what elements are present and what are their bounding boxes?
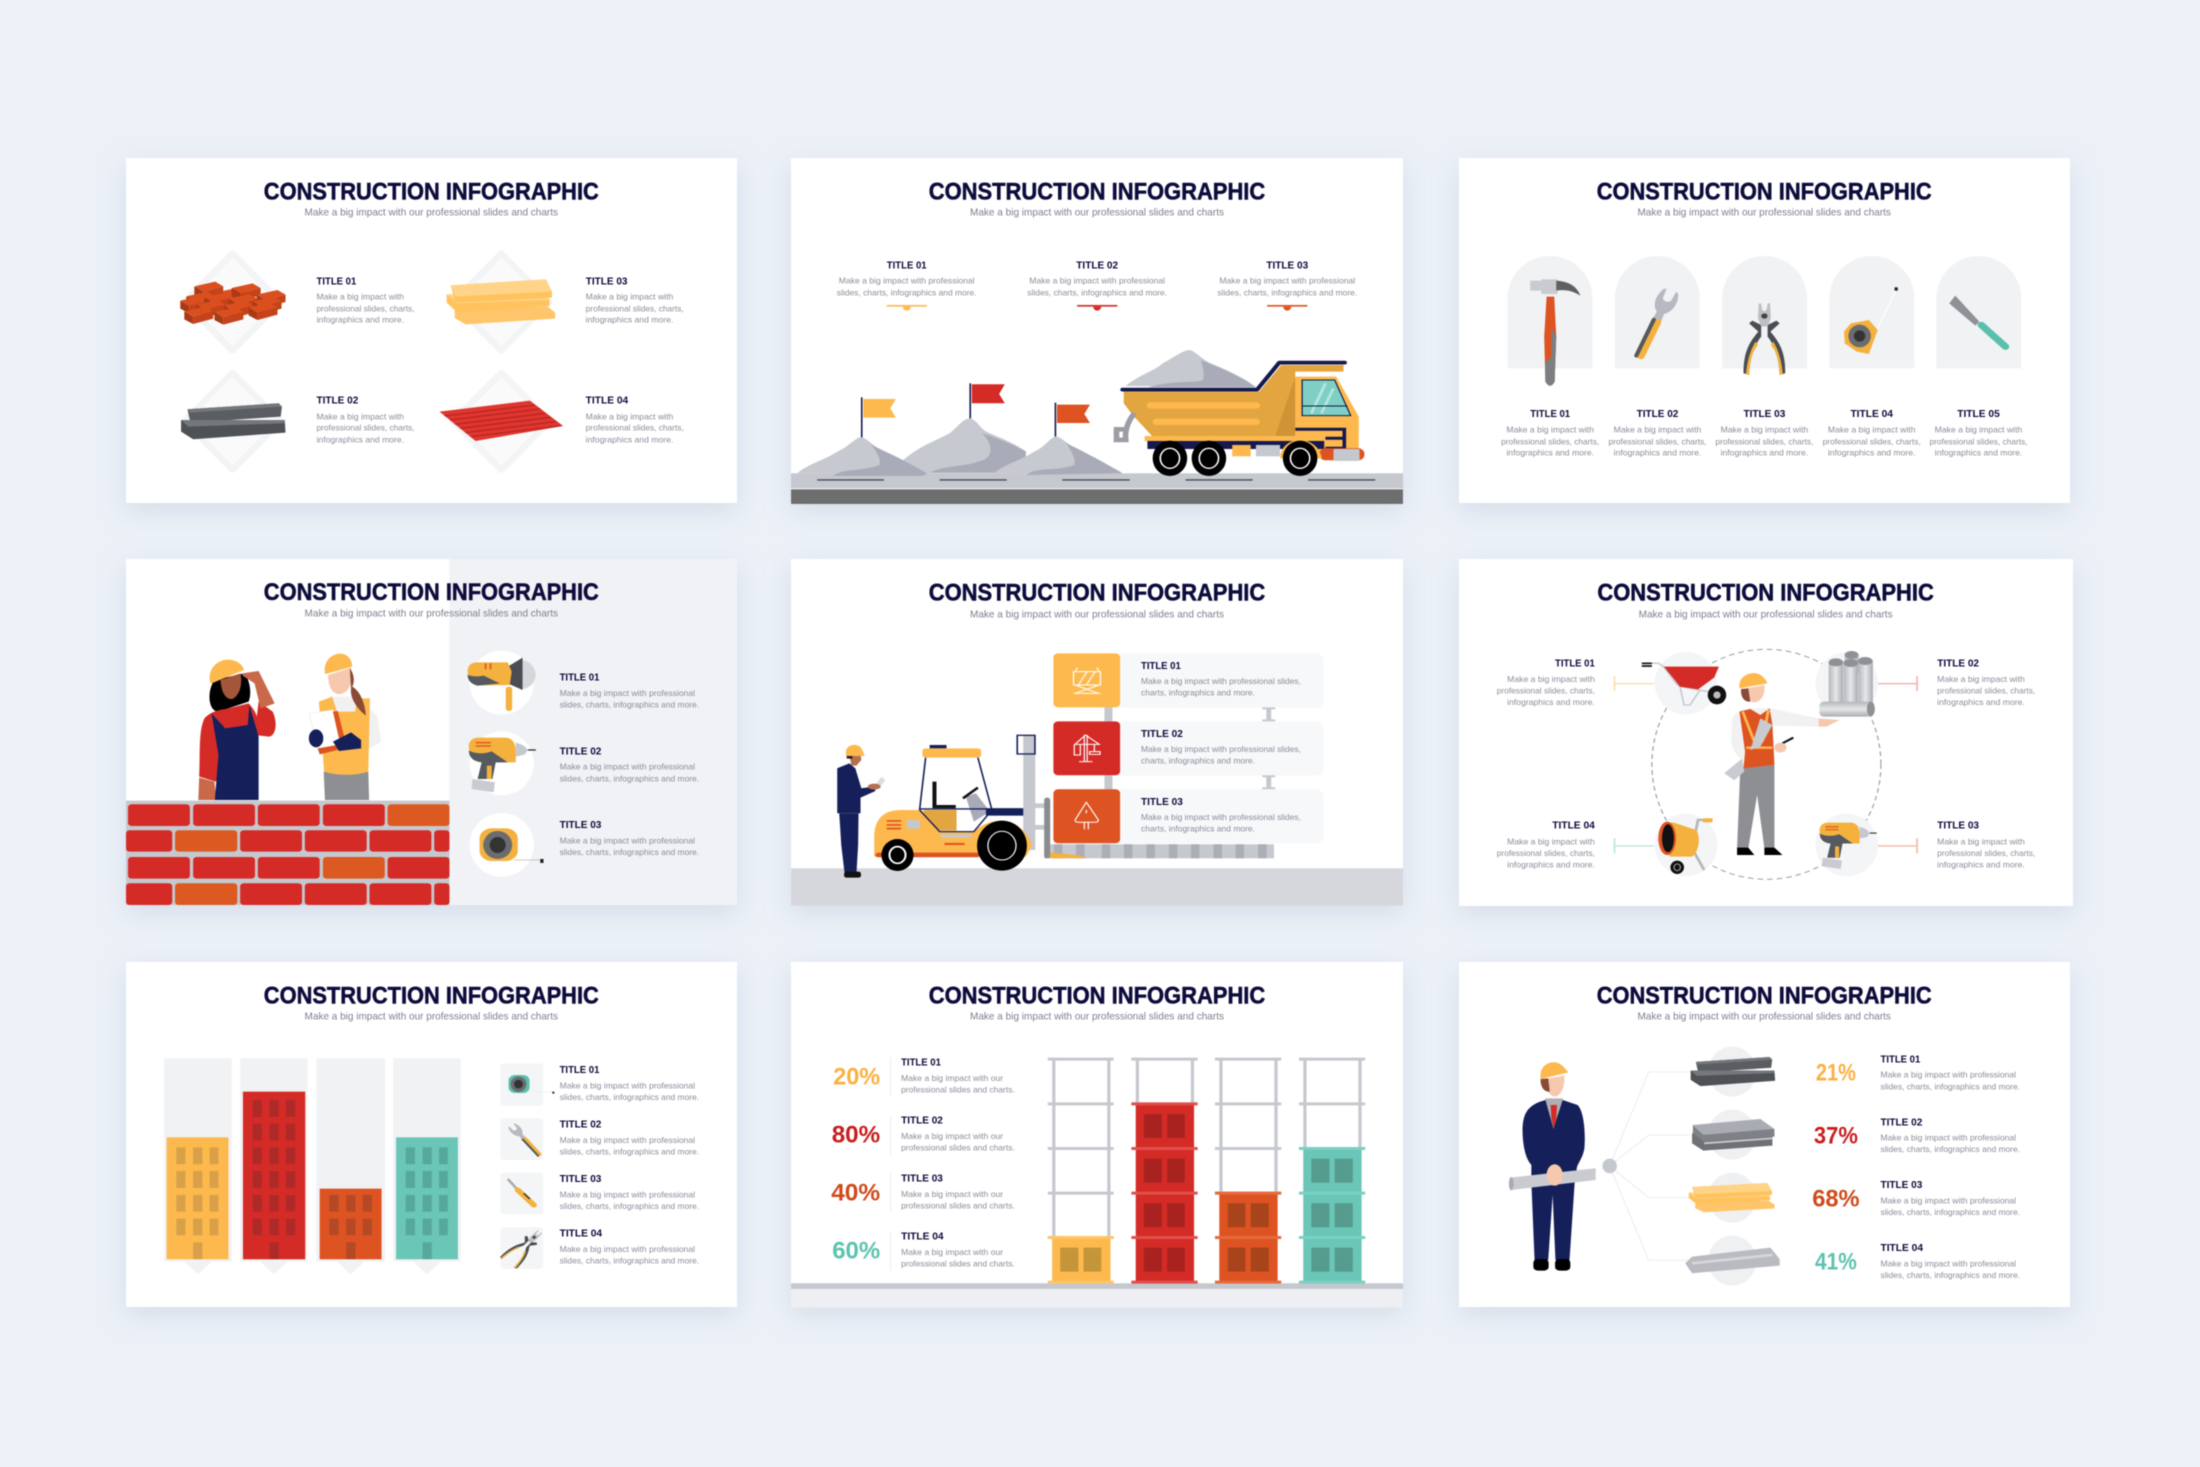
markers under titles xyxy=(887,305,1307,311)
item: title 04: Make a big impact with xyxy=(1828,426,1916,435)
item: title 01: Make a big impact with professional xyxy=(839,277,975,286)
stat: 80%: 80% xyxy=(832,1121,880,1148)
column: yellow xyxy=(1048,1236,1114,1284)
item: title 01: professional slides, charts, xyxy=(316,304,414,313)
item: title 02: charts, infographics and more. xyxy=(1141,757,1255,766)
item: title 01 xyxy=(837,260,977,297)
icon: cement mixer xyxy=(1655,814,1717,876)
item: title 02 xyxy=(1141,729,1301,766)
item: title 04: Make a big impact with professional xyxy=(1880,1259,2016,1268)
road xyxy=(791,473,1403,504)
item: title 01: infographics and more. xyxy=(1506,449,1594,458)
item: title 02: Make a big impact with professional slides, xyxy=(1141,745,1301,754)
bar tracks xyxy=(164,1058,461,1274)
icon tile: warning xyxy=(1053,789,1120,843)
item: title 03: Make a big impact with professional xyxy=(560,1190,695,1199)
icon: planks xyxy=(447,253,555,351)
item: title 03: Make a big impact with professional xyxy=(1219,277,1355,286)
flag: yellow xyxy=(861,397,896,437)
item: title 04 xyxy=(1880,1243,2020,1280)
item: title 04: TITLE 04 xyxy=(1880,1243,1923,1254)
icon: steel beams xyxy=(181,373,286,470)
item: title 02 xyxy=(1027,260,1167,297)
item: title 02: Make a big impact with xyxy=(1937,675,2025,684)
item: title 01: TITLE 01 xyxy=(1555,658,1595,669)
item: title 02: professional slides, charts, xyxy=(1608,437,1706,446)
list dividers xyxy=(890,1058,892,1271)
item: title 04: infographics and more. xyxy=(1828,449,1915,458)
item: title 04: TITLE 04 xyxy=(586,396,629,407)
item: title 02: slides, charts, infographics and more. xyxy=(560,1147,699,1156)
item: title 01 xyxy=(1501,409,1599,458)
column: orange xyxy=(1215,1192,1281,1284)
bar: teal building xyxy=(396,1137,458,1259)
item: title 04: infographics and more. xyxy=(1507,860,1595,869)
item: title 04: TITLE 04 xyxy=(1850,409,1893,420)
item: title 02 xyxy=(1937,658,2035,707)
item: title 03 xyxy=(560,1174,699,1211)
item: title 03: charts, infographics and more. xyxy=(1141,825,1255,834)
icon: red rods xyxy=(439,373,563,470)
item: title 01: Make a big impact with our xyxy=(901,1074,1003,1083)
stat: 60%: 60% xyxy=(832,1237,880,1264)
item: title 05: Make a big impact with xyxy=(1935,426,2023,435)
title: CONSTRUCTION INFOGRAPHIC xyxy=(929,579,1265,606)
icon: pliers xyxy=(1743,303,1785,375)
flag: red xyxy=(969,383,1005,418)
icon: angle grinder xyxy=(468,651,536,715)
title: CONSTRUCTION INFOGRAPHIC xyxy=(929,178,1265,205)
icon: metal bars xyxy=(1685,1236,1780,1286)
icon tile: crane xyxy=(1053,721,1120,775)
panel: engineer with materials xyxy=(1459,962,2070,1307)
title: CONSTRUCTION INFOGRAPHIC xyxy=(264,178,599,205)
item: title 03: Make a big impact with xyxy=(586,293,674,302)
icon: planks xyxy=(1689,1173,1775,1223)
item: title 02: TITLE 02 xyxy=(316,396,359,407)
item: title 03: professional slides, charts, xyxy=(1715,437,1813,446)
item: title 03: TITLE 03 xyxy=(1266,260,1309,271)
item: title 02: TITLE 02 xyxy=(1637,409,1679,420)
title: CONSTRUCTION INFOGRAPHIC xyxy=(1597,178,1932,205)
cards xyxy=(1098,653,1323,843)
item: title 02 xyxy=(1880,1117,2020,1154)
item: title 02: infographics and more. xyxy=(1937,698,2025,707)
stat: 21%: 21% xyxy=(1816,1059,1856,1086)
materials tree artwork xyxy=(1509,1047,1780,1286)
item: title 01: Make a big impact with xyxy=(316,293,405,302)
item: title 01: infographics and more. xyxy=(1507,698,1595,707)
item: title 01: professional slides, charts, xyxy=(1497,687,1595,696)
panel: forklift stack xyxy=(791,559,1403,906)
item: title 03: professional slides, charts, xyxy=(586,304,684,313)
panel: building bar chart xyxy=(126,962,737,1307)
item: title 04: Make a big impact with professional xyxy=(560,1245,695,1254)
icon: pipes xyxy=(1815,651,1878,717)
item: title 05: professional slides, charts, xyxy=(1930,437,2028,446)
panel: materials with diamonds xyxy=(126,158,737,503)
item: title 02: TITLE 02 xyxy=(1937,658,1979,669)
item: title 04: professional slides, charts, xyxy=(586,424,684,433)
bar: red building xyxy=(243,1092,305,1259)
icon: chisel xyxy=(1949,296,2005,347)
item: title 02: Make a big impact with professional xyxy=(1880,1134,2016,1143)
icon: steel beams xyxy=(1691,1047,1775,1097)
item: title 01: Make a big impact with xyxy=(1506,426,1594,435)
item: title 04: professional slides and charts. xyxy=(901,1260,1015,1269)
icon: tape measure xyxy=(1844,287,1898,354)
item: title 03: TITLE 03 xyxy=(901,1174,943,1185)
title: CONSTRUCTION INFOGRAPHIC xyxy=(929,982,1265,1009)
icon tile: barrier xyxy=(1053,653,1120,707)
scene artwork xyxy=(791,305,1403,504)
item: title 03: infographics and more. xyxy=(586,316,673,325)
subtitle: Make a big impact with our professional slides and charts xyxy=(1637,1010,1891,1022)
item: title 01: TITLE 01 xyxy=(1141,661,1181,672)
item: title 01 xyxy=(1497,658,1595,707)
item: title 04 xyxy=(586,396,684,444)
item: title 03 xyxy=(901,1174,1015,1210)
item: title 02 xyxy=(560,1119,699,1156)
item: title 03 xyxy=(1715,409,1813,458)
item: title 02: Make a big impact with professional xyxy=(560,763,695,772)
stat: 68%: 68% xyxy=(1812,1185,1860,1212)
item: title 02 xyxy=(901,1116,1015,1153)
item: title 01: TITLE 01 xyxy=(560,1065,600,1076)
item: title 01: TITLE 01 xyxy=(560,673,600,684)
item: title 03: Make a big impact with our xyxy=(901,1190,1003,1199)
connectors xyxy=(1104,707,1275,789)
chart and icons artwork xyxy=(164,1058,554,1274)
item: title 03: Make a big impact with professional slides, xyxy=(1141,813,1301,822)
item: title 04 xyxy=(901,1232,1015,1269)
column: red xyxy=(1131,1102,1198,1284)
scaffold artwork xyxy=(791,1058,1403,1308)
panel: workers and brick wall xyxy=(126,559,737,905)
item: title 04 xyxy=(1497,821,1595,869)
item: title 03: infographics and more. xyxy=(1937,860,2025,869)
man in suit xyxy=(1509,1062,1596,1271)
item: title 02: professional slides and charts. xyxy=(901,1144,1015,1153)
item: title 01: slides, charts, infographics and more. xyxy=(1880,1082,2020,1091)
item: title 04: Make a big impact with xyxy=(586,412,674,421)
item: title 01: infographics and more. xyxy=(316,316,404,325)
item: title 02: slides, charts, infographics and more. xyxy=(1027,288,1167,297)
item: title 03: slides, charts, infographics and more. xyxy=(560,1202,699,1211)
item: title 01: slides, charts, infographics and more. xyxy=(837,288,977,297)
item: title 03: TITLE 03 xyxy=(1880,1180,1923,1191)
panel: dump truck and flags xyxy=(791,158,1403,504)
subtitle: Make a big impact with our professional slides and charts xyxy=(1637,206,1891,218)
item: title 01: Make a big impact with professional xyxy=(1880,1071,2016,1080)
item: title 02: Make a big impact with xyxy=(1614,426,1702,435)
item: title 02: slides, charts, infographics and more. xyxy=(1880,1145,2020,1154)
item: title 04: TITLE 04 xyxy=(901,1232,944,1243)
item: title 02: professional slides, charts, xyxy=(316,424,414,433)
subtitle: Make a big impact with our professional slides and charts xyxy=(1639,608,1893,620)
item: title 04 xyxy=(560,1228,699,1265)
stat: 37%: 37% xyxy=(1814,1122,1858,1149)
panel: tools arches xyxy=(1459,158,2070,503)
item: title 05: infographics and more. xyxy=(1935,449,2022,458)
item: title 02: Make a big impact with professional xyxy=(560,1136,695,1145)
icon: wrench xyxy=(1629,287,1681,362)
item: title 04: slides, charts, infographics and more. xyxy=(1880,1271,2020,1280)
forklift xyxy=(874,745,1032,871)
item: title 03: TITLE 03 xyxy=(1937,821,1979,832)
gravel piles xyxy=(797,418,1123,476)
tools artwork xyxy=(1508,256,2021,386)
item: title 01: professional slides, charts, xyxy=(1501,437,1599,446)
brick wall xyxy=(126,801,449,905)
subtitle: Make a big impact with our professional slides and charts xyxy=(970,608,1224,620)
item: title 02 xyxy=(316,396,414,444)
column: teal xyxy=(1299,1147,1365,1284)
item: title 02: TITLE 02 xyxy=(901,1116,943,1127)
item: title 03 xyxy=(1141,797,1301,834)
item: title 03: TITLE 03 xyxy=(1141,797,1183,808)
item: title 04: TITLE 04 xyxy=(1552,821,1595,832)
item: title 03: Make a big impact with xyxy=(1721,426,1809,435)
item: title 03: professional slides, charts, xyxy=(1937,849,2035,858)
icon: utility knife xyxy=(501,1173,543,1214)
item: title 02: TITLE 02 xyxy=(560,746,602,757)
item: title 05: TITLE 05 xyxy=(1957,409,2000,420)
item: title 04: infographics and more. xyxy=(586,435,673,444)
dashed ring xyxy=(1652,649,1881,879)
item: title 03: slides, charts, infographics and more. xyxy=(1880,1208,2020,1217)
item: title 02: TITLE 02 xyxy=(1076,260,1118,271)
item: title 04: professional slides, charts, xyxy=(1497,849,1595,858)
item: title 03: professional slides and charts. xyxy=(901,1201,1015,1210)
item: title 03: Make a big impact with professional xyxy=(1880,1197,2016,1206)
item: title 02: Make a big impact with our xyxy=(901,1132,1003,1141)
stat: 20%: 20% xyxy=(833,1063,880,1090)
title: CONSTRUCTION INFOGRAPHIC xyxy=(1597,579,1934,606)
item: title 03: TITLE 03 xyxy=(1744,409,1786,420)
floor xyxy=(791,1283,1403,1308)
item: title 03: TITLE 03 xyxy=(586,276,628,287)
item: title 03: TITLE 03 xyxy=(560,820,602,831)
item: title 04: TITLE 04 xyxy=(560,1228,602,1239)
item: title 01: Make a big impact with professional xyxy=(560,689,695,698)
title: CONSTRUCTION INFOGRAPHIC xyxy=(1597,982,1932,1009)
workers and icons artwork xyxy=(126,651,543,905)
connector tree xyxy=(1610,1072,1690,1260)
item: title 03: slides, charts, infographics and more. xyxy=(1217,288,1357,297)
icon: hammer xyxy=(1530,279,1580,386)
item: title 01: professional slides and charts. xyxy=(901,1086,1015,1095)
item: title 03: TITLE 03 xyxy=(560,1174,602,1185)
white left area xyxy=(126,559,450,905)
subtitle: Make a big impact with our professional slides and charts xyxy=(305,1010,558,1022)
item: title 01 xyxy=(560,673,699,710)
stat: 41%: 41% xyxy=(1815,1248,1857,1275)
item: title 02 xyxy=(1608,409,1706,458)
title: CONSTRUCTION INFOGRAPHIC xyxy=(264,579,599,606)
item: title 01: slides, charts, infographics and more. xyxy=(560,701,699,710)
item: title 01: Make a big impact with professional xyxy=(560,1081,695,1090)
item: title 02: Make a big impact with xyxy=(316,412,405,421)
item: title 03 xyxy=(1880,1180,2020,1217)
item: title 01: Make a big impact with professional slides, xyxy=(1141,677,1301,686)
item: title 05 xyxy=(1930,409,2028,458)
icon: bricks xyxy=(180,253,286,351)
item: title 02: professional slides, charts, xyxy=(1937,687,2035,696)
icon: teal tape xyxy=(501,1064,554,1106)
subtitle: Make a big impact with our professional slides and charts xyxy=(305,607,558,619)
item: title 04: Make a big impact with our xyxy=(901,1248,1003,1257)
materials artwork xyxy=(180,253,563,470)
icon: pliers xyxy=(499,1226,548,1269)
item: title 02: infographics and more. xyxy=(1614,449,1701,458)
item: title 03: slides, charts, infographics and more. xyxy=(560,848,699,857)
connector lines xyxy=(1615,676,1917,853)
scaffold frames xyxy=(1048,1058,1365,1283)
item: title 01 xyxy=(901,1058,1015,1095)
forklift artwork xyxy=(791,653,1403,906)
item: title 02: infographics and more. xyxy=(316,435,404,444)
item: title 01: Make a big impact with xyxy=(1507,675,1595,684)
item: title 02: TITLE 02 xyxy=(1141,729,1183,740)
mast xyxy=(1017,735,1050,858)
item: title 01: TITLE 01 xyxy=(1880,1054,1921,1065)
hub xyxy=(1602,1159,1617,1173)
icon: tape measure xyxy=(470,813,543,877)
man with tablet xyxy=(837,745,885,878)
item: title 03 xyxy=(1937,821,2035,869)
item: title 04: Make a big impact with xyxy=(1507,837,1595,846)
icon: slabs xyxy=(1692,1110,1774,1160)
icon: wrench xyxy=(501,1118,544,1160)
item: title 01 xyxy=(560,1065,699,1102)
panel: scaffold chart xyxy=(791,962,1403,1308)
panel: engineer circle xyxy=(1459,559,2073,906)
subtitle: Make a big impact with our professional slides and charts xyxy=(305,206,558,218)
worker: woman in overalls xyxy=(198,660,276,800)
item: title 02: slides, charts, infographics and more. xyxy=(560,774,699,783)
item: title 01 xyxy=(316,276,414,325)
worker: woman in vest xyxy=(309,654,381,800)
item: title 02 xyxy=(560,746,699,783)
item: title 02: TITLE 02 xyxy=(560,1119,602,1130)
item: title 01: TITLE 01 xyxy=(901,1058,941,1069)
dump truck xyxy=(1116,350,1364,476)
item: title 01: charts, infographics and more. xyxy=(1141,689,1255,698)
item: title 04: slides, charts, infographics and more. xyxy=(560,1256,699,1265)
item: title 04: professional slides, charts, xyxy=(1823,437,1921,446)
bar: orange building xyxy=(320,1189,382,1259)
stat: 40%: 40% xyxy=(831,1179,880,1206)
item: title 01: TITLE 01 xyxy=(887,260,927,271)
item: title 03: Make a big impact with xyxy=(1937,837,2025,846)
engineer artwork xyxy=(1615,649,1917,879)
item: title 03 xyxy=(1217,260,1357,297)
item: title 03: Make a big impact with professional xyxy=(560,837,695,846)
icon: drill xyxy=(1815,814,1878,876)
item: title 01: slides, charts, infographics and more. xyxy=(560,1093,699,1102)
item: title 04 xyxy=(1823,409,1921,458)
engineer figure xyxy=(1724,673,1840,855)
title: CONSTRUCTION INFOGRAPHIC xyxy=(264,982,599,1009)
subtitle: Make a big impact with our professional slides and charts xyxy=(970,1010,1224,1022)
item: title 03: infographics and more. xyxy=(1721,449,1808,458)
item: title 02: Make a big impact with professional xyxy=(1029,277,1165,286)
item: title 01 xyxy=(1880,1054,2020,1091)
ground xyxy=(791,868,1403,906)
icon: wheelbarrow xyxy=(1642,652,1726,715)
item: title 01: TITLE 01 xyxy=(316,276,357,287)
icon: drill xyxy=(469,731,536,795)
arches xyxy=(1508,256,2021,368)
fork platform xyxy=(1044,844,1274,858)
item: title 03 xyxy=(586,276,684,325)
bar: yellow building xyxy=(167,1137,228,1259)
item: title 01: TITLE 01 xyxy=(1530,409,1570,420)
flag: orange xyxy=(1055,403,1090,437)
item: title 02: TITLE 02 xyxy=(1880,1117,1923,1128)
item: title 01 xyxy=(1141,661,1301,698)
item: title 03 xyxy=(560,820,699,857)
subtitle: Make a big impact with our professional slides and charts xyxy=(970,206,1224,218)
